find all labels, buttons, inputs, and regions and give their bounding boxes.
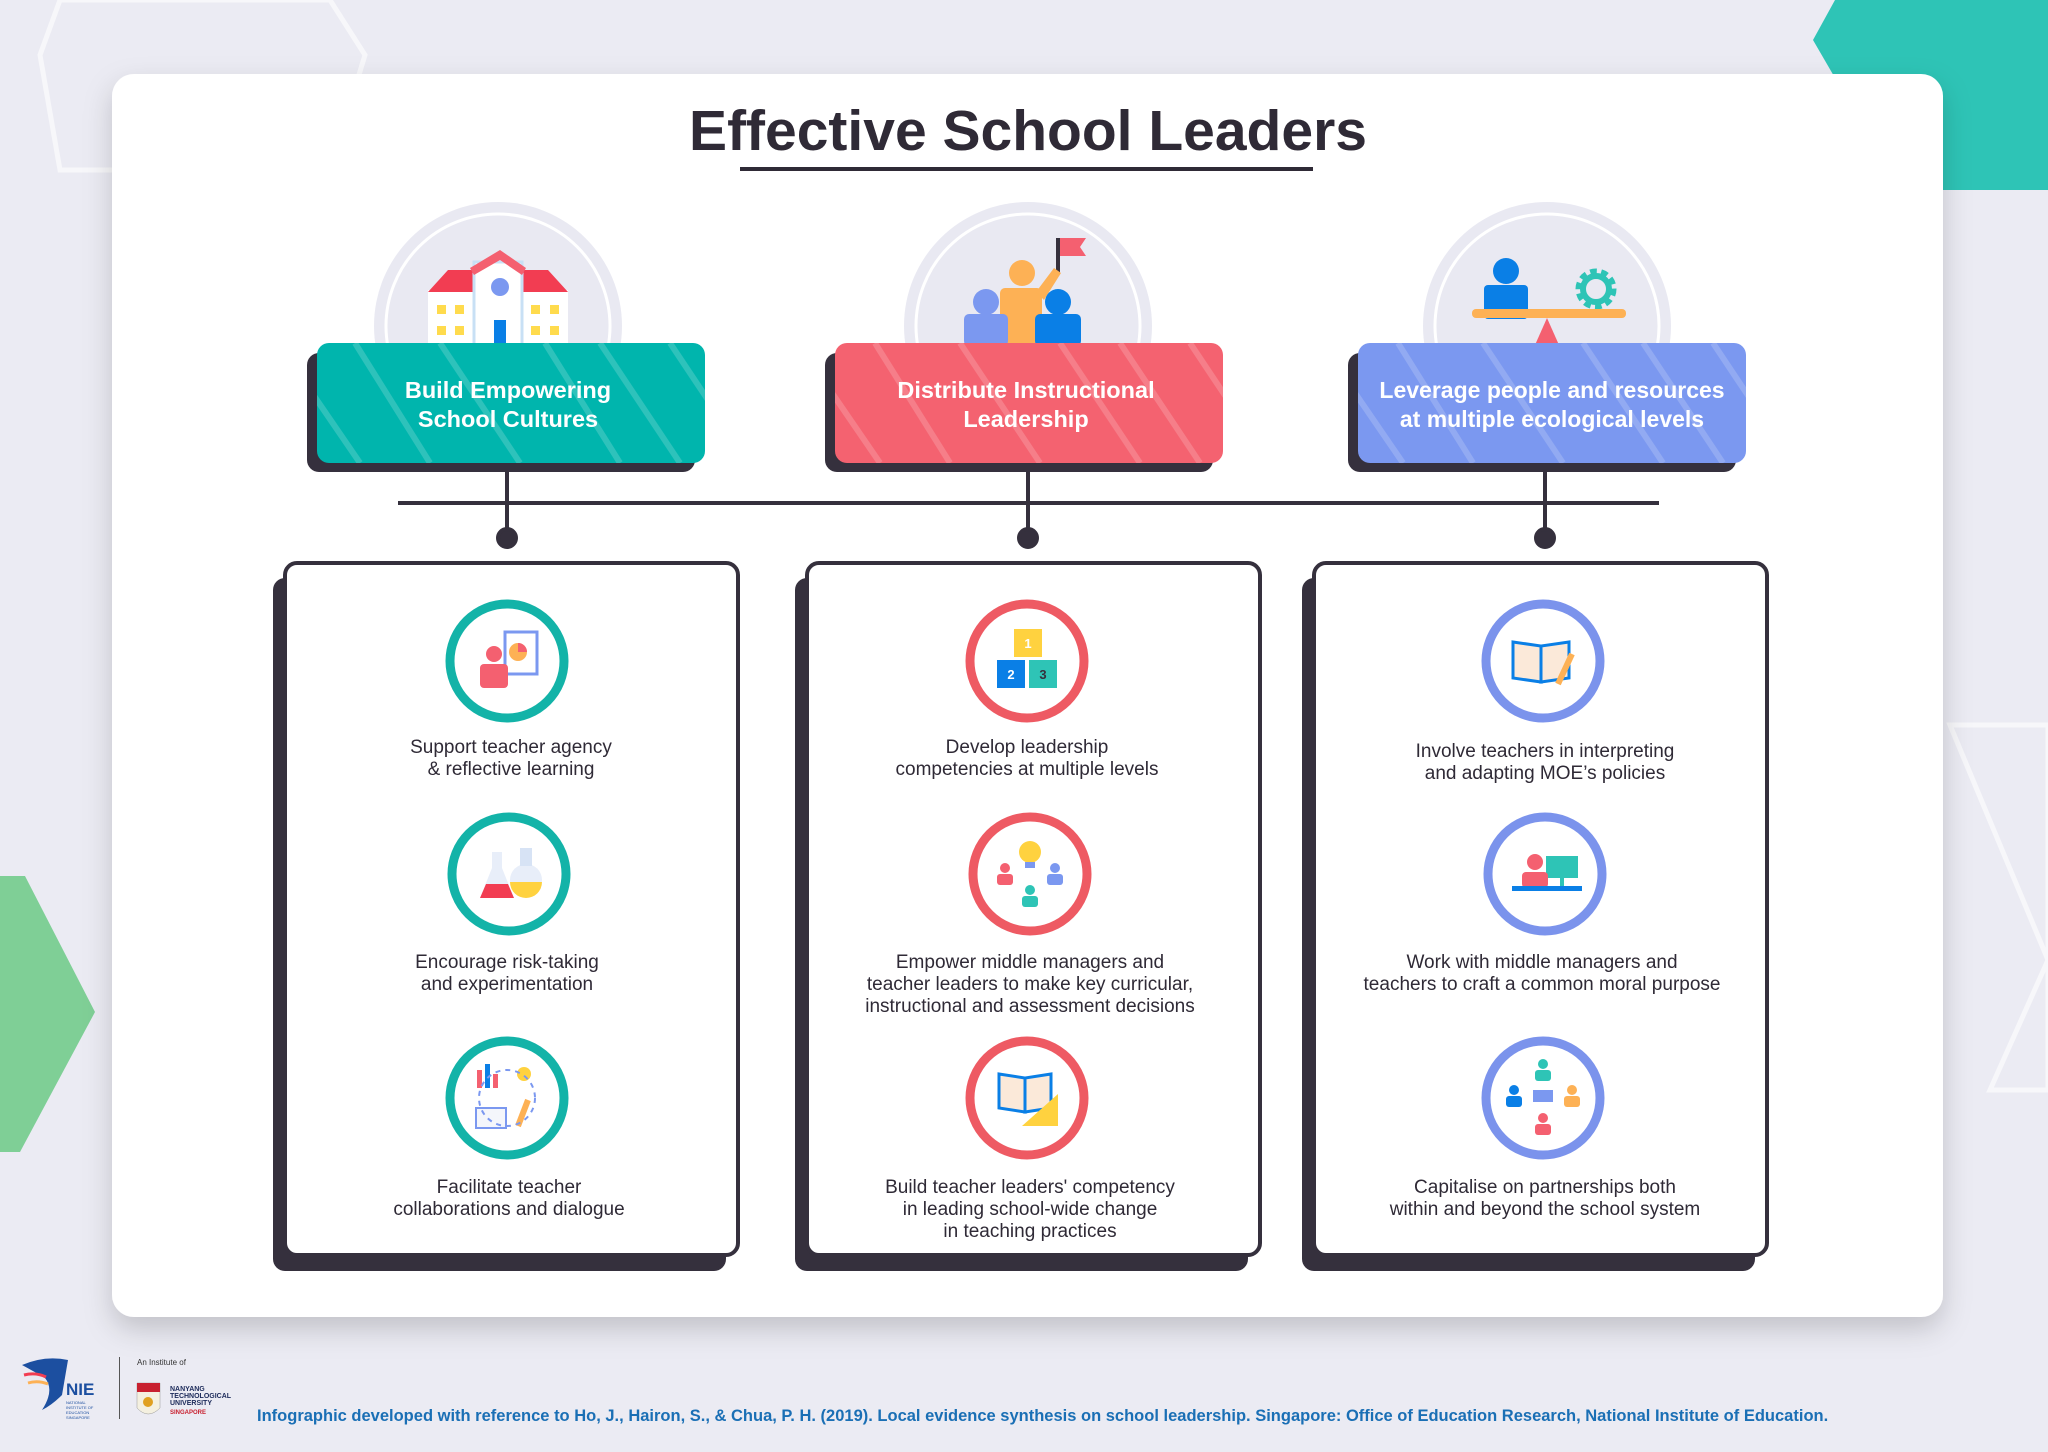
icon: partnerships network xyxy=(1486,1041,1600,1155)
logo: NIE: NATIONAL xyxy=(66,1400,86,1405)
icon: open book pencil xyxy=(1486,604,1600,718)
panel: left: and experimentation xyxy=(421,974,593,995)
panel: left: Support teacher agency xyxy=(410,737,612,758)
logo: NTU: SINGAPORE xyxy=(170,1410,206,1416)
icon: podium blocks: 3 xyxy=(1039,667,1047,682)
panel: right: and adapting MOE’s policies xyxy=(1425,763,1665,784)
panel: right: within and beyond the school system xyxy=(1389,1199,1700,1220)
decoration: green hexagon xyxy=(0,876,95,1152)
panel: left: & reflective learning xyxy=(428,759,594,780)
header: Leverage people and resources: Leverage people and resources xyxy=(1379,377,1725,403)
header: Distribute Instructional Leadership: Leadership xyxy=(963,406,1089,432)
decoration: teal hexagon xyxy=(1813,0,2048,190)
icon: presentation desk xyxy=(1488,817,1602,931)
header: Build Empowering School Cultures: Build Empowering xyxy=(405,377,611,403)
logo: NIE: EDUCATION xyxy=(66,1410,89,1415)
white card xyxy=(112,74,1943,1317)
icon: book and set square xyxy=(970,1041,1084,1155)
logo: NIE: NIE xyxy=(66,1380,94,1399)
header: Leverage people and resources: at multiple ecological levels xyxy=(1400,406,1704,432)
panel: middle: instructional and assessment decisions xyxy=(865,996,1195,1017)
panel: left: collaborations and dialogue xyxy=(393,1199,625,1220)
panel: middle: teacher leaders to make key curricular, xyxy=(867,974,1193,995)
panel: right: teachers to craft a common moral purpose xyxy=(1364,974,1720,995)
logo: NIE: SINGAPORE xyxy=(66,1415,90,1420)
icon: flasks xyxy=(452,817,566,931)
panel: middle xyxy=(795,563,1260,1271)
icon: collaboration xyxy=(450,1041,564,1155)
icon: balance person and gear xyxy=(1472,258,1626,345)
logo: NIE: INSTITUTE OF xyxy=(66,1405,94,1410)
icon: team with flag xyxy=(964,238,1086,346)
panel: middle: competencies at multiple levels xyxy=(896,759,1158,780)
header: Leverage people and resources xyxy=(1348,202,1746,472)
panel: middle: in leading school-wide change xyxy=(903,1199,1157,1220)
icon: podium blocks: 1 xyxy=(1024,636,1032,651)
panel: right: Involve teachers in interpreting xyxy=(1416,741,1674,762)
footer reference text: Infographic developed with reference to Ho, J., Hairon, S., & Chua, P. H. (2019). Local evidence synthesis on school leadership. Singapore: Office of Education Research, National Institute of Education. xyxy=(257,1407,1828,1425)
icon: podium blocks xyxy=(970,604,1084,718)
header: Distribute Instructional Leadership xyxy=(825,202,1223,472)
logo: NTU: TECHNOLOGICAL xyxy=(170,1393,232,1400)
logo: NTU: UNIVERSITY xyxy=(170,1400,212,1407)
logo: NTU: An Institute of xyxy=(137,1358,187,1367)
panel: middle: in teaching practices xyxy=(943,1221,1117,1242)
icon: teacher agency xyxy=(450,604,564,718)
panel: middle: Build teacher leaders' competency xyxy=(885,1177,1175,1198)
panel: right: Work with middle managers and xyxy=(1406,952,1678,973)
header: Build Empowering School Cultures xyxy=(307,202,705,472)
panel: middle: Empower middle managers and xyxy=(896,952,1164,973)
icon: school building xyxy=(428,250,568,345)
panel: left: Encourage risk-taking xyxy=(415,952,599,973)
icon: podium blocks: 2 xyxy=(1007,667,1015,682)
title: Effective School Leaders xyxy=(689,99,1367,163)
panel: left: Facilitate teacher xyxy=(437,1177,582,1198)
panel: left xyxy=(273,563,738,1271)
logo: NTU xyxy=(137,1358,232,1416)
header: Distribute Instructional Leadership: Distribute Instructional xyxy=(897,377,1155,403)
icon: bulb network xyxy=(973,817,1087,931)
panel: right xyxy=(1302,563,1767,1271)
header: Build Empowering School Cultures: School Cultures xyxy=(418,406,598,432)
panel: right: Capitalise on partnerships both xyxy=(1414,1177,1676,1198)
panel: middle: Develop leadership xyxy=(946,737,1108,758)
logo: NIE xyxy=(22,1358,94,1420)
connector lines xyxy=(398,465,1659,547)
logo: NTU: NANYANG xyxy=(170,1386,205,1393)
